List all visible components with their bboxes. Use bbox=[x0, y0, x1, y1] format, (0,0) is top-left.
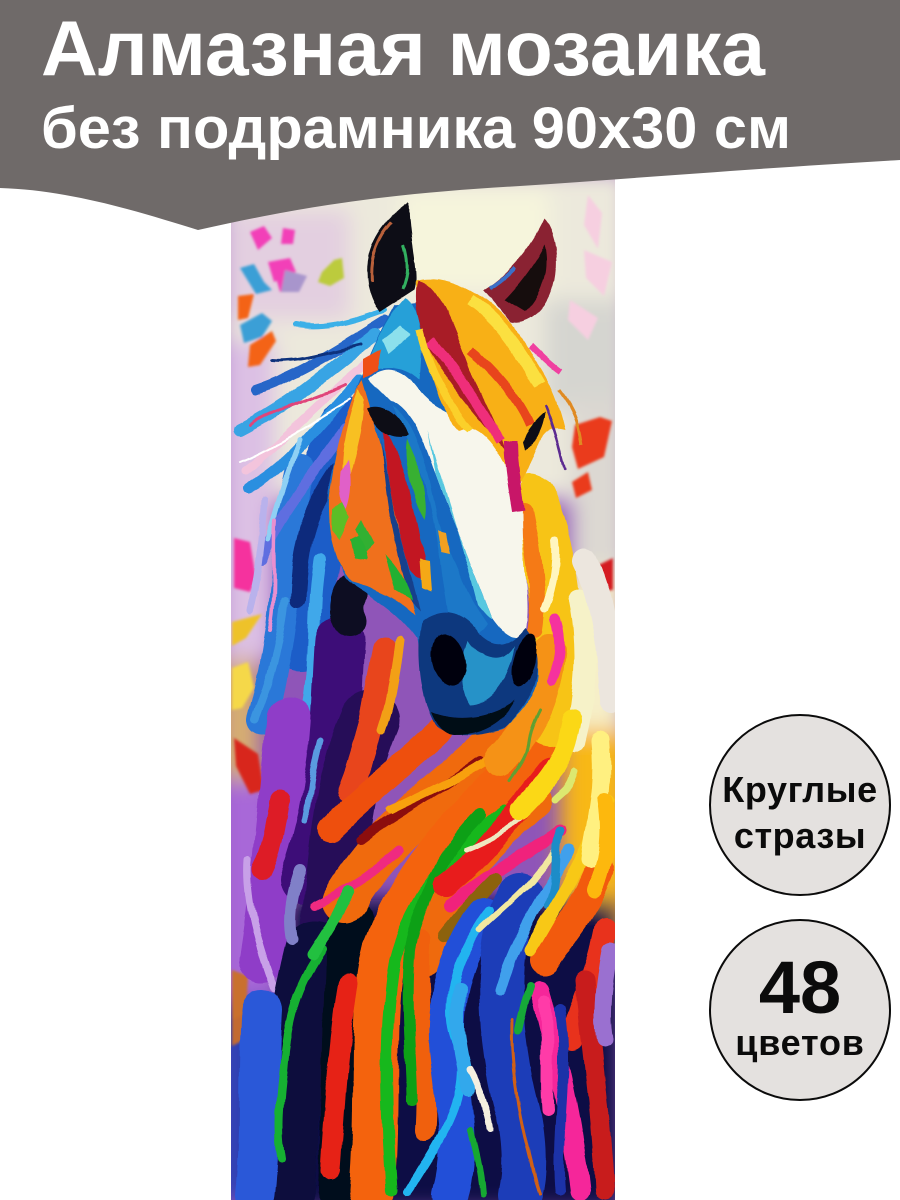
purple and dark lower-left area bbox=[248, 590, 400, 1195]
yellow right mane bbox=[500, 500, 612, 890]
header banner bbox=[0, 0, 900, 230]
blaze bbox=[368, 369, 527, 637]
painted horse bbox=[240, 202, 612, 1195]
forelock bbox=[415, 278, 565, 490]
face base bbox=[328, 300, 538, 733]
blue left mane bbox=[240, 310, 385, 740]
eyes bbox=[367, 406, 408, 437]
badge: round rhinestones: стразы bbox=[734, 815, 866, 856]
badge: 48 colours bbox=[709, 919, 891, 1101]
badge: round rhinestones bbox=[709, 714, 891, 896]
badge: 48 colours: цветов bbox=[735, 1022, 865, 1063]
title bbox=[41, 4, 791, 161]
painting background bbox=[220, 170, 630, 1200]
badge: 48 colours: 48 bbox=[759, 946, 841, 1029]
subtitle: без подрамника 90х30 см bbox=[41, 96, 791, 161]
title: Алмазная мозаика bbox=[41, 4, 766, 92]
painting: colourful horse bbox=[231, 179, 615, 1200]
background paint dabs bbox=[232, 195, 613, 1046]
ears bbox=[367, 202, 416, 312]
badge: round rhinestones: Круглые bbox=[722, 769, 878, 810]
cheek colours bbox=[329, 380, 415, 615]
muzzle bbox=[419, 612, 538, 735]
flowing neck and lower mane bbox=[279, 730, 610, 1195]
horse head bbox=[328, 202, 582, 735]
